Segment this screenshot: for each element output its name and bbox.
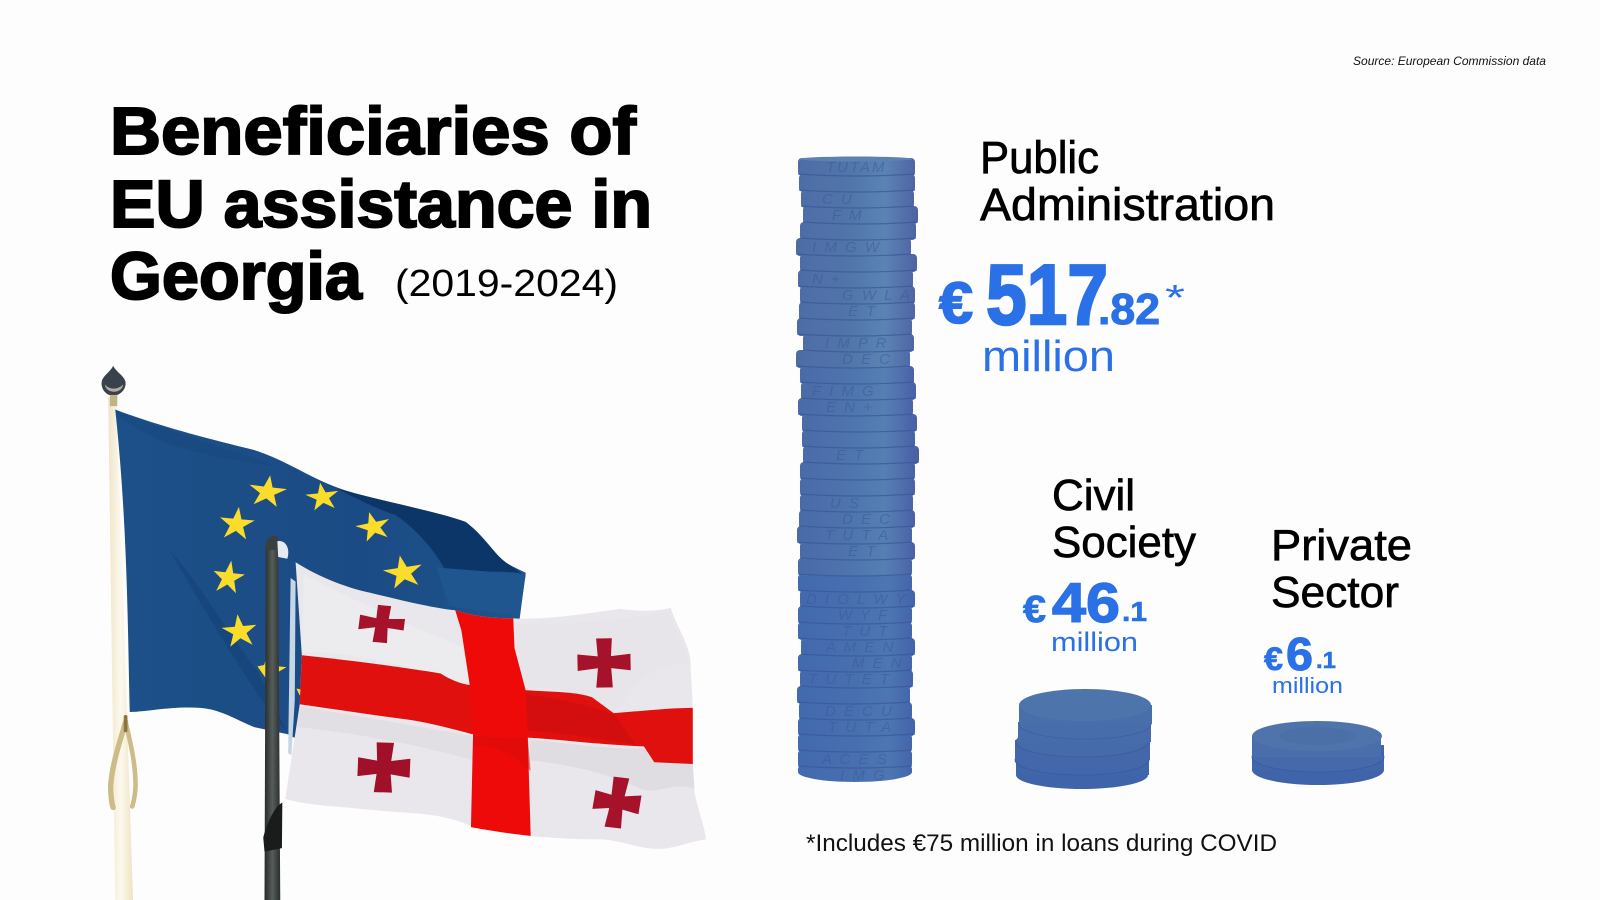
cross: bottom right [590,775,644,830]
coin stack: private sector [1252,721,1384,785]
coin stack: public administration: F I M G [812,383,876,400]
value: 517.82 million: € [939,271,973,336]
label: civil society: Society [1052,518,1196,567]
coin stack: public administration: A M E N [825,639,895,656]
coin stack: public administration: E T [848,543,877,560]
coin stack: public administration: E T [836,447,865,464]
cross: top right [577,638,631,688]
value: 46.1 million: 46 [1052,571,1120,634]
coin stack: public administration [796,156,919,784]
value: 46.1 million [1023,571,1147,657]
coin stack: public administration: C U [822,191,854,208]
value: 517.82 million: * [1165,277,1185,318]
label: civil society: Civil [1052,471,1135,520]
coin stack: public administration: F M [832,207,864,224]
coin stack: public administration: T U T E T [808,671,891,688]
footnote: *Includes €75 million in loans during COVID [806,830,1277,857]
cross: bottom left [357,742,411,793]
coin stack: public administration: D E C [842,511,892,528]
coin stack: public administration: E T [848,303,877,320]
coin stack: public administration: D I O L W Y [806,591,907,608]
red horizontal band [300,655,693,764]
title: Beneficiaries of [110,94,637,169]
value: 6.1 million [1264,628,1343,698]
title: Georgia [110,239,363,314]
label: private sector: Private [1271,521,1412,570]
coin stack: public administration: I M P R [825,335,888,352]
title date range: (2019-2024) [395,263,618,305]
value: 517.82 million: million [982,332,1115,381]
coin stack: public administration: I M G [840,767,887,784]
value: 6.1 million: € [1264,641,1283,677]
EU stars [210,473,426,696]
value: 517.82 million: .82 [1098,285,1160,334]
title: EU assistance in [110,167,652,242]
value: 46.1 million: € [1023,589,1046,631]
label: private sector: Sector [1271,568,1399,617]
coin stack: public administration: D E C U [825,703,894,720]
coin stack: public administration: N + [812,271,842,288]
source note: Source: European Commission data [1353,54,1546,68]
value: 46.1 million: .1 [1122,596,1147,627]
pole finial [102,366,126,406]
label: civil society [1052,471,1196,567]
Georgian flagpole [263,536,296,900]
coin stack: public administration: U S [830,495,861,512]
coin stack: public administration: D E C [842,351,892,368]
EU flagpole [108,397,133,900]
illustration: EU and Georgian flags [102,366,706,900]
coin stack: public administration: I M G W [812,239,881,256]
value: 6.1 million: .1 [1316,647,1336,673]
coin stack: public administration: G W L A [842,287,912,304]
coin stack: public administration: W Y F [838,607,889,624]
label: public administration [980,132,1275,230]
coin stack: public administration: T U T [842,623,890,640]
coin stack: public administration: E N + [826,399,874,416]
label: public administration: Public [980,132,1099,183]
title [110,94,652,314]
label: private sector [1271,521,1412,617]
value: 6.1 million: million [1272,673,1343,698]
cross: top left [357,603,406,644]
value: 46.1 million: million [1051,627,1138,657]
coin stack: civil society [1015,689,1152,789]
coin stack: public administration: T U T A [828,719,893,736]
flag rope [111,717,136,808]
label: public administration: Administration [980,179,1275,230]
coin stack: public administration: T U T A [825,527,890,544]
red vertical band [455,610,531,836]
coin stack: public administration: TUTAM [826,159,887,176]
value: 517.82 million: 517 [986,248,1108,343]
Georgian flag [285,562,706,849]
value: 6.1 million: 6 [1286,628,1313,680]
value: 517.82 million [939,248,1185,381]
coin stack: public administration: M E N [852,655,904,672]
EU flag [115,410,526,739]
coin stack: public administration: A C E S [821,751,889,768]
